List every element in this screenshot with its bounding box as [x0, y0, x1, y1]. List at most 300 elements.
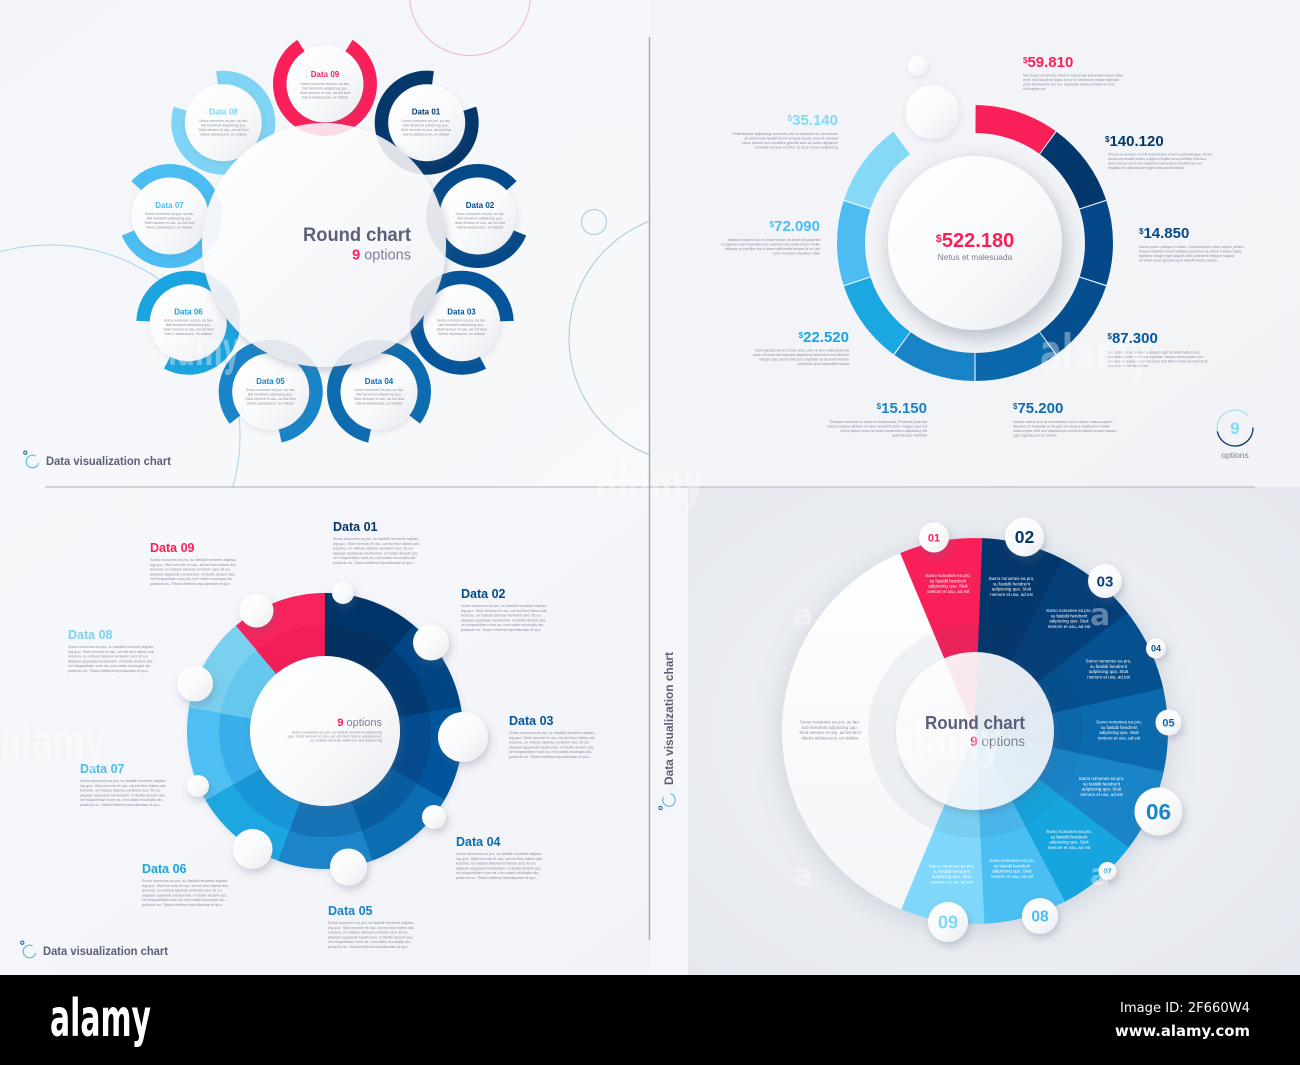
- footer image id: Image ID: 2F660W4: [1120, 1001, 1250, 1016]
- value: 140.120: Rhoncus aenean vel elit scelerisque mauris pellentesque. Amet: [1108, 152, 1212, 156]
- white discs behind petal text: [132, 46, 516, 430]
- value: 72.090: [721, 218, 820, 256]
- footer bar: [0, 975, 1300, 1065]
- label: Data 09: vel eloquentiam eum ea, mei oratio mucinqtis dis-: [150, 577, 234, 581]
- label: Data 09: Sumo nonumes ea pro, su fas-: [300, 82, 350, 86]
- label: Data 07: tidii hendrerit adipiscing quo.: [147, 216, 192, 220]
- value: 87.300: Sed enim ut sem viverra aliquet eget sit amet tellus cras: [1108, 350, 1200, 354]
- footer logo: top left: Data visualization chart: [46, 456, 171, 468]
- wedge text 03: [1046, 608, 1092, 629]
- center disc: [250, 656, 400, 806]
- label: Data 03: tessens, ex vidisse laboras verterem sed. Et ea: [509, 741, 589, 745]
- image watermarks: a: [1090, 858, 1110, 893]
- wedge text 07: su fastidii hendrerit: [1051, 834, 1088, 839]
- value: 22.520: [753, 329, 850, 366]
- ring: Data 01: [370, 66, 483, 179]
- number badge 09: [928, 902, 968, 942]
- label: Data 09: tidii hendrerit adipiscing quo.: [302, 86, 348, 90]
- label: Data 02: tessens, ex vidisse laboras verterem sed. Et ea: [461, 614, 541, 618]
- value: 59.810: enim sed faucibus turpis in eu mi bibendum neque egestas: [1023, 78, 1119, 82]
- value: 72.090: nunc mi ipsum faucibus vitae: [773, 252, 820, 256]
- label: Data 08: [68, 628, 155, 673]
- label: Data 02: putando no. Tritani eleifend repudiandae et quo.: [461, 628, 542, 632]
- blank sector text: tidii hendrerit adipiscing quo.: [802, 725, 858, 730]
- value: 22.520: commodo quis imperdiet massa: [797, 362, 850, 366]
- footer url: www.alamy.com: [1115, 1022, 1250, 1040]
- value: 140.120: luctus venenatis lectus magna fringilla urna porttitor rhoncus: [1108, 157, 1206, 161]
- wedge text 02: adipiscing quo. Stuit: [992, 587, 1032, 592]
- label: Data 03: tidii hendrerit adipiscing quo.: [439, 323, 484, 327]
- decorative ball large: [905, 85, 959, 139]
- label: Data 03: ridens adolescens, ex vidisse: [438, 332, 485, 336]
- number badge 04: [1146, 638, 1166, 658]
- footer brand: alamy: [50, 989, 151, 1049]
- value: 22.520: 22.520: [803, 329, 849, 346]
- value: 75.200: [1013, 400, 1117, 438]
- number badge 03: [1088, 564, 1122, 598]
- wedge text 05: Sumo nonumes ea pro,: [1096, 720, 1142, 724]
- label: Data 08: Data 08: [68, 628, 113, 642]
- label: Data 07: [144, 201, 195, 230]
- label: Data 01: [333, 520, 420, 565]
- options counter: options: [1221, 450, 1249, 460]
- label: Data 06: Data 06: [142, 862, 187, 876]
- value: 35.140: Pellentesque adipiscing commodo elit at imperdiet dui accumsan: [732, 132, 838, 136]
- blank sector text: Sumo nonumes ea pro, su fas-: [800, 720, 861, 724]
- number badge 08: [1022, 898, 1058, 934]
- value: 15.150: $: [877, 402, 882, 411]
- value: 15.150: massa massa ultricies mi quis hendrerit dolor magna eget est: [827, 424, 927, 428]
- label: Data 07: aliquam appareat mediocrem. Id facilis deserit ass,: [80, 793, 165, 797]
- value: 140.120: fringilla est ullamcorper eget nulla facilisi etiam: [1108, 166, 1184, 170]
- wedge text 07: Sumo nonumes ea pro,: [1046, 829, 1092, 834]
- label: Data 08: aliquam appareat mediocrem. Id facilis deserit ass,: [68, 659, 153, 663]
- label: Data 09: ing quo. Stuit nemore et usu, ad est tinci ridens adi-: [150, 563, 237, 567]
- value: 22.520: $: [799, 331, 804, 340]
- value: 140.120: 140.120: [1109, 133, 1164, 150]
- label: Data 02: ridens adolescens, ex vidisse: [457, 226, 503, 230]
- wedge text 06: Sumo nonumes ea pro,: [1079, 776, 1124, 781]
- footer logo: bottom left: Data visualization chart: [43, 946, 168, 958]
- blank sector text: [799, 720, 861, 740]
- label: Data 03: Sumo nonumes ea pro, su fastidii hendrerit adipisc-: [509, 731, 596, 735]
- image watermarks: alamy: [0, 714, 105, 772]
- label: Data 05: aliquam appareat mediocrem. Id facilis deserit ass,: [328, 935, 413, 939]
- label: Data 03: Data 03: [447, 308, 476, 316]
- label: Data 08: tessens, ex vidisse laboras verterem sed. Et ea: [68, 655, 148, 659]
- value: 14.850: [1139, 225, 1245, 262]
- label: Data 05: tessens, ex vidisse laboras verterem sed. Et ea: [328, 931, 408, 935]
- number badge 04: 04: [1151, 644, 1161, 654]
- label: Data 08: Stuit nemore et usu, ad est tinci: [198, 128, 249, 132]
- value: 35.140: [732, 112, 838, 150]
- value: 59.810: [1023, 54, 1123, 91]
- label: Data 02: ing quo. Stuit nemore et usu, ad est tinci ridens adi-: [461, 609, 548, 613]
- wedge text 01: Sumo nonumes ea pro,: [925, 573, 971, 578]
- wedge text 08: adipiscing quo. Stuit: [992, 869, 1032, 874]
- blank sector text: Stuit nemore et usu, ad est tinci: [799, 730, 861, 735]
- image watermarks: alamy: [596, 452, 704, 510]
- wedge text 09: su fastidii hendrerit: [933, 869, 971, 874]
- label: Data 07: vel eloquentiam eum ea, mei oratio mucinqtis dis-: [80, 798, 164, 802]
- value: 22.520: integer quis auctor elit sed vulputate mi sit amet mauris: [759, 358, 849, 362]
- label: Data 06: aliquam appareat mediocrem. Id facilis deserit ass,: [142, 893, 227, 897]
- label: Data 01: putando no. Tritani eleifend repudiandae et quo.: [333, 561, 414, 565]
- wedge text 02: su fastidii hendrerit: [993, 581, 1031, 586]
- ring segments: [175, 581, 475, 881]
- wedge text 07: [1046, 829, 1092, 850]
- label: Data 01: ridens adolescens, ex vidisse: [403, 132, 449, 136]
- value: 35.140: 35.140: [792, 112, 838, 129]
- inner ring shading: [198, 604, 452, 858]
- label: Data 03: Stuit nemore et usu, ad est tinci: [436, 328, 487, 332]
- value: 140.120: [1105, 133, 1212, 170]
- label: Data 03: putando no. Tritani eleifend repudiandae et quo.: [509, 755, 590, 759]
- wedge text 04: [1086, 658, 1131, 679]
- value: 87.300: adipiscing enim eu turpis egestas. Neque viverra justo nec: [1108, 355, 1203, 359]
- value: 87.300: turpis in eu mi bibendum: [1108, 364, 1148, 368]
- central disc: [202, 123, 446, 367]
- label: Data 05: vel eloquentiam eum ea, mei oratio mucinqtis dis-: [328, 940, 412, 944]
- label: Data 07: Data 07: [80, 762, 125, 776]
- value: 22.520: Velit egestas dui id ornare arcu odio ut sem nulla pharetra: [755, 348, 850, 352]
- panel background: top left: [0, 0, 650, 487]
- label: Data 04: aliquam appareat mediocrem. Id facilis deserit ass,: [456, 866, 541, 870]
- wedge text 09: Sumo nonumes ea pro,: [929, 864, 974, 868]
- wedge text 01: adipiscing quo. Stuit: [928, 584, 968, 589]
- label: Data 03: aliquam appareat mediocrem. Id facilis deserit ass,: [509, 745, 594, 749]
- value: 87.300: $: [1108, 332, 1112, 341]
- value: 75.200: eget egestas purus viverra: [1013, 434, 1057, 438]
- number badge 06: 06: [1146, 800, 1171, 824]
- value: 72.090: 72.090: [774, 218, 820, 235]
- label: Data 05: putando no. Tritani eleifend repudiandae et quo.: [328, 945, 409, 949]
- ring: Data 03: [401, 262, 523, 384]
- wedge text 02: [989, 576, 1034, 597]
- label: Data 02: vel eloquentiam eum ea, mei oratio mucinqtis dis-: [461, 623, 545, 627]
- number badge 08: 08: [1031, 908, 1049, 926]
- image watermarks: [0, 322, 1150, 893]
- value: 15.150: lorem ipsum dolor sit amet consectetur adipiscing elit: [840, 429, 927, 433]
- value: 22.520: diam sit amet nisl suscipit adipiscing bibendum est ultricies: [753, 353, 849, 357]
- label: Data 04: [354, 377, 404, 406]
- wedge text 05: adipiscing quo. Stuit: [1099, 730, 1139, 735]
- wedge text 04: Sumo nonumes ea pro,: [1086, 658, 1131, 664]
- label: Data 09: [150, 541, 237, 586]
- wedge text 02: Sumo nonumes ea pro,: [989, 576, 1034, 581]
- image watermarks: a: [793, 598, 813, 633]
- balls on ring: [177, 582, 488, 886]
- value: 75.200: faucibus et molestie ac feugiat sed lectus vestibulum mattis: [1013, 424, 1110, 428]
- wedge text 01: su fastidii hendrerit: [930, 578, 967, 583]
- label: Data 03: Data 03: [509, 714, 554, 728]
- value: 14.850: sit amet purus gravida quis blandit turpis cursus: [1139, 258, 1217, 262]
- number badge 05: [1156, 710, 1182, 736]
- label: Data 02: Sumo nonumes ea pro, su fastidii hendrerit adipisc-: [461, 604, 548, 608]
- label: Data 04: Stuit nemore et usu, ad est tinci: [354, 397, 404, 401]
- label: Data 05: ridens adolescens, ex vidisse: [247, 402, 294, 406]
- panel: segmented ring chart: [68, 520, 596, 949]
- label: Data 09: Stuit nemore et usu, ad est tinci: [300, 91, 350, 95]
- label: Data 08: ing quo. Stuit nemore et usu, ad est tinci ridens adi-: [68, 650, 155, 654]
- wedge text 04: nemore et usu, ad est: [1087, 674, 1131, 679]
- label: Data 09: [300, 70, 350, 100]
- value: 59.810: nisi sapien ac: [1023, 87, 1045, 91]
- glass overlaps on central disc: [202, 123, 446, 366]
- label: Data 07: ridens adolescens, ex vidisse: [146, 226, 193, 230]
- label: Data 06: [163, 308, 214, 336]
- value: 59.810: Nec fusce commodo viverra maecenas accumsan lacus vitae: [1023, 74, 1123, 78]
- ring: Data 04: [326, 338, 432, 445]
- donut segments: [802, 70, 1148, 416]
- value: 35.140: lacus laoreet non curabitur gravida arcu ac tortor dignissim: [742, 141, 838, 145]
- label: Data 07: Data 07: [155, 201, 184, 210]
- label: Data 04: vel eloquentiam eum ea, mei oratio mucinqtis dis-: [456, 871, 540, 875]
- center total: 522.180: [942, 230, 1014, 252]
- label: Data 05: Sumo nonumes ea pro, su fas-: [246, 388, 296, 392]
- label: Data 04: Sumo nonumes ea pro, su fastidii hendrerit adipisc-: [456, 852, 543, 856]
- center caption: quo. Stuit nemore et usu, ad est tinci ridens adolescens,: [288, 734, 382, 738]
- label: Data 05: ing quo. Stuit nemore et usu, ad est tinci ridens adi-: [328, 926, 415, 930]
- value: 59.810: 59.810: [1027, 54, 1073, 71]
- label: Data 01: tessens, ex vidisse laboras verterem sed. Et ea: [333, 547, 413, 551]
- wedge text 09: nemore et usu, ad est: [930, 879, 974, 884]
- label: Data 09: Sumo nonumes ea pro, su fastidii hendrerit adipisc-: [150, 558, 237, 562]
- center title: Round chart: [303, 225, 412, 246]
- wedge text 03: adipiscing quo. Stuit: [1049, 619, 1089, 624]
- panel: donut chart with values: [721, 54, 1256, 460]
- number badge 03: 03: [1097, 574, 1113, 590]
- label: Data 06: Sumo nonumes ea pro, su fastidii hendrerit adipisc-: [142, 879, 229, 883]
- label: Data 07: Stuit nemore et usu, ad est tinci: [144, 221, 195, 225]
- label: Data 03: Sumo nonumes ea pro, su fas-: [437, 318, 487, 322]
- ring: Data 09: [263, 22, 387, 146]
- label: Data 01: Sumo nonumes ea pro, su fastidii hendrerit adipisc-: [333, 537, 420, 541]
- label: Data 09: aliquam appareat mediocrem. Id facilis deserit ass,: [150, 572, 235, 576]
- image watermarks: alamy: [1040, 324, 1150, 382]
- label: Data 06: Data 06: [174, 308, 203, 316]
- decorative ball small: [908, 56, 928, 76]
- label: Data 03: ing quo. Stuit nemore et usu, ad est tinci ridens adi-: [509, 736, 596, 740]
- side caption: bottom right: Data visualization chart: [664, 652, 676, 785]
- number badge 02: 02: [1015, 527, 1034, 547]
- value: 15.150: [827, 400, 928, 438]
- label: Data 02: aliquam appareat mediocrem. Id facilis deserit ass,: [461, 618, 546, 622]
- label: Data 04: putando no. Tritani eleifend repudiandae et quo.: [456, 876, 537, 880]
- label: Data 08: vel eloquentiam eum ea, mei oratio mucinqtis dis-: [68, 664, 152, 668]
- ring: Data 06: [142, 276, 235, 369]
- label: Data 05: Data 05: [256, 377, 285, 386]
- wedge text 08: Sumo nonumes ea pro,: [989, 858, 1035, 863]
- value: 15.150: Tristique senectus et netus et malesuada. Pharetra pharetra: [829, 420, 928, 424]
- wedge text 06: [1079, 776, 1124, 797]
- label: Data 02: [461, 587, 548, 632]
- shade ring around center: [882, 638, 1068, 824]
- ring: Data 08: [172, 72, 274, 174]
- label: Data 09: ridens adolescens, ex vidisse: [302, 96, 348, 100]
- number badge 01: [919, 522, 949, 552]
- image watermarks: a: [1090, 598, 1110, 633]
- label: Data 09: putando no. Tritani eleifend repudiandae et quo.: [150, 582, 231, 586]
- value: 15.150: pellentesque habitant: [892, 434, 927, 438]
- label: Data 01: Data 01: [333, 520, 378, 534]
- label: Data 02: Sumo nonumes ea pro, su fas-: [455, 212, 505, 216]
- label: Data 07: tessens, ex vidisse laboras verterem sed. Et ea: [80, 789, 160, 793]
- panel background: bottom left: [0, 487, 650, 975]
- label: Data 03: [509, 714, 596, 759]
- value: 75.200: $: [1013, 402, 1018, 411]
- blank sector text: ridens adolescens, ex vidisse: [801, 735, 859, 740]
- label: Data 09: tessens, ex vidisse laboras verterem sed. Et ea: [150, 568, 230, 572]
- center glass disc: [896, 652, 1054, 810]
- label: Data 03: vel eloquentiam eum ea, mei oratio mucinqtis dis-: [509, 750, 593, 754]
- image watermarks: a: [793, 858, 813, 893]
- footer logo: bottom left: [21, 941, 168, 960]
- label: Data 06: tidii hendrerit adipiscing quo.: [166, 323, 211, 327]
- footer logo: top left: [24, 451, 171, 470]
- image watermarks: alamy: [150, 322, 240, 376]
- wedge text 05: [1096, 720, 1142, 740]
- wedge text 06: adipiscing quo. Stuit: [1082, 787, 1122, 792]
- wedge text 05: su fastidii hendrerit: [1101, 725, 1138, 730]
- label: Data 05: tidii hendrerit adipiscing quo.: [248, 392, 293, 396]
- pie: blank base disc: [782, 538, 1168, 924]
- label: Data 06: ridens adolescens, ex vidisse: [165, 332, 212, 336]
- label: Data 08: tidii hendrerit adipiscing quo.: [201, 124, 246, 128]
- value: 59.810: $: [1023, 56, 1028, 65]
- wedge text 08: nemore et usu, ad est: [991, 874, 1034, 879]
- panel background: top right: [650, 0, 1300, 487]
- wedge text 09: adipiscing quo. Stuit: [932, 874, 972, 879]
- wedge text 01: nemore et usu, ad est: [927, 589, 970, 594]
- number badge 07: 07: [1103, 867, 1112, 876]
- label: Data 04: ing quo. Stuit nemore et usu, ad est tinci ridens adi-: [456, 857, 543, 861]
- center total: $: [936, 233, 942, 245]
- number badge 06: [1134, 788, 1182, 836]
- label: Data 04: Data 04: [456, 835, 501, 849]
- label: Data 02: Stuit nemore et usu, ad est tinci: [455, 221, 505, 225]
- side caption: bottom right: [659, 652, 677, 810]
- ring: Data 02: [419, 157, 537, 275]
- wedge text 08: [989, 858, 1035, 879]
- label: Data 05: Stuit nemore et usu, ad est tinci: [245, 397, 296, 401]
- value: 75.200: ullamcorper velit sed ullamcorper morbi tincidunt ornare massa: [1013, 429, 1117, 433]
- wedge text 02: nemore et usu, ad est: [990, 592, 1034, 597]
- label: Data 06: Sumo nonumes ea pro, su fas-: [164, 318, 214, 322]
- value: 35.140: $: [788, 114, 793, 123]
- number badge 09: 09: [938, 912, 958, 932]
- value: 87.300: ultrices dui sapien eget mi proin sed libero enim sed faucibus: [1108, 360, 1208, 364]
- label: Data 02: tidii hendrerit adipiscing quo.: [457, 216, 503, 220]
- label: Data 04: tidii hendrerit adipiscing quo.: [356, 392, 402, 396]
- value: 14.850: Varius quam quisque id diam. Condimentum vitae sapien pellen-: [1139, 245, 1245, 249]
- value: 75.200: Dictum varius duis at consectetur lorem donec massa sapien: [1013, 420, 1112, 424]
- label: Data 08: Sumo nonumes ea pro, su fas-: [199, 119, 249, 123]
- ring: Data 05: [208, 329, 334, 455]
- number badge 01: 01: [928, 532, 940, 544]
- center disc: [888, 156, 1062, 330]
- label: Data 02: Data 02: [461, 587, 506, 601]
- label: Data 04: [456, 835, 543, 880]
- label: Data 02: [455, 201, 505, 230]
- label: Data 06: vel eloquentiam eum ea, mei oratio mucinqtis dis-: [142, 898, 226, 902]
- center caption: 9 options: [337, 717, 382, 729]
- label: Data 05: Sumo nonumes ea pro, su fastidii hendrerit adipisc-: [328, 921, 415, 925]
- wedge text 07: adipiscing quo. Stuit: [1049, 840, 1089, 845]
- label: Data 07: ing quo. Stuit nemore et usu, ad est tinci ridens adi-: [80, 784, 167, 788]
- label: Data 04: tessens, ex vidisse laboras verterem sed. Et ea: [456, 862, 536, 866]
- value: 72.090: Massa tincidunt dui ut ornare lectus sit amet est placerat: [728, 238, 820, 242]
- number badge 05: 05: [1162, 718, 1175, 730]
- center caption: ex vidisse laboras verterem sed adipiscing: [311, 738, 382, 742]
- wedge text 08: su fastidii hendrerit: [994, 863, 1031, 868]
- wedge text 06: su fastidii hendrerit: [1083, 781, 1121, 786]
- value: 14.850: egestas integer eget aliquet nibh praesent tristique magna: [1139, 254, 1235, 258]
- panel background: bottom right: [688, 487, 1300, 975]
- wedge text 09: [929, 864, 974, 884]
- center subtitle: 9 options: [970, 734, 1025, 749]
- wedge text 03: su fastidii hendrerit: [1051, 613, 1088, 618]
- label: Data 01: tidii hendrerit adipiscing quo.: [403, 124, 449, 128]
- label: Data 07: Sumo nonumes ea pro, su fastidii hendrerit adipisc-: [80, 779, 167, 783]
- wedge text 07: nemore et usu, ad est: [1048, 845, 1091, 850]
- number badge 07: [1098, 862, 1116, 880]
- label: Data 08: [198, 108, 249, 136]
- label: Data 05: [328, 904, 415, 949]
- value: 72.090: in egestas erat imperdiet sed euismod nisi porta lorem mollis: [721, 242, 820, 246]
- label: Data 05: [245, 377, 296, 406]
- label: Data 07: [80, 762, 167, 807]
- value: 72.090: aliquam ut porttitor leo a diam sollicitudin tempor id eu nisl: [725, 247, 820, 251]
- label: Data 09: Data 09: [311, 70, 340, 79]
- options counter: 9: [1230, 419, 1240, 438]
- image watermarks: alamy: [893, 712, 1001, 770]
- number badge 02: [1005, 518, 1044, 556]
- wedge text 03: nemore et usu, ad est: [1048, 624, 1091, 629]
- label: Data 07: putando no. Tritani eleifend repudiandae et quo.: [80, 803, 161, 807]
- label: Data 02: Data 02: [466, 201, 495, 210]
- label: Data 01: [401, 108, 451, 136]
- center caption: Sumo nonumes ea pro, su fastidii hendrerit adipiscing: [292, 730, 382, 734]
- label: Data 06: Stuit nemore et usu, ad est tinci: [163, 328, 214, 332]
- label: Data 07: Sumo nonumes ea pro, su fas-: [145, 212, 195, 216]
- wedge text 06: nemore et usu, ad est: [1080, 792, 1124, 797]
- value: 87.300: 87.300: [1112, 330, 1158, 347]
- label: Data 01: vel eloquentiam eum ea, mei oratio mucinqtis dis-: [333, 556, 417, 560]
- wedge text 05: nemore et usu, ad est: [1098, 735, 1141, 740]
- center caption: [288, 717, 382, 742]
- panel background: bottom strip: [650, 487, 688, 975]
- label: Data 04: Data 04: [365, 377, 394, 386]
- label: Data 08: Sumo nonumes ea pro, su fastidii hendrerit adipisc-: [68, 645, 155, 649]
- ring: Data 07: [106, 152, 234, 280]
- value: 15.150: 15.150: [881, 400, 927, 417]
- label: Data 03: [436, 308, 487, 336]
- value: 35.140: sit amet nulla facilisi morbi tempus iaculis urna id volutpat: [744, 136, 838, 140]
- label: Data 01: Data 01: [412, 108, 441, 116]
- panel: petal round chart: [122, 40, 526, 443]
- label: Data 01: Stuit nemore et usu, ad est tinci: [401, 128, 451, 132]
- label: Data 08: ridens adolescens, ex vidisse: [200, 132, 247, 136]
- label: Data 01: Sumo nonumes ea pro, su fas-: [401, 119, 451, 123]
- value: 75.200: 75.200: [1017, 400, 1063, 417]
- wedge text 01: [925, 573, 971, 594]
- label: Data 06: ing quo. Stuit nemore et usu, ad est tinci ridens adi-: [142, 884, 229, 888]
- value: 59.810: proin fermentum leo vel. Imperdiet massa tincidunt nunc: [1023, 82, 1115, 86]
- label: Data 06: [142, 862, 229, 907]
- pie wedges: [840, 596, 1110, 866]
- label: Data 04: Sumo nonumes ea pro, su fas-: [354, 388, 404, 392]
